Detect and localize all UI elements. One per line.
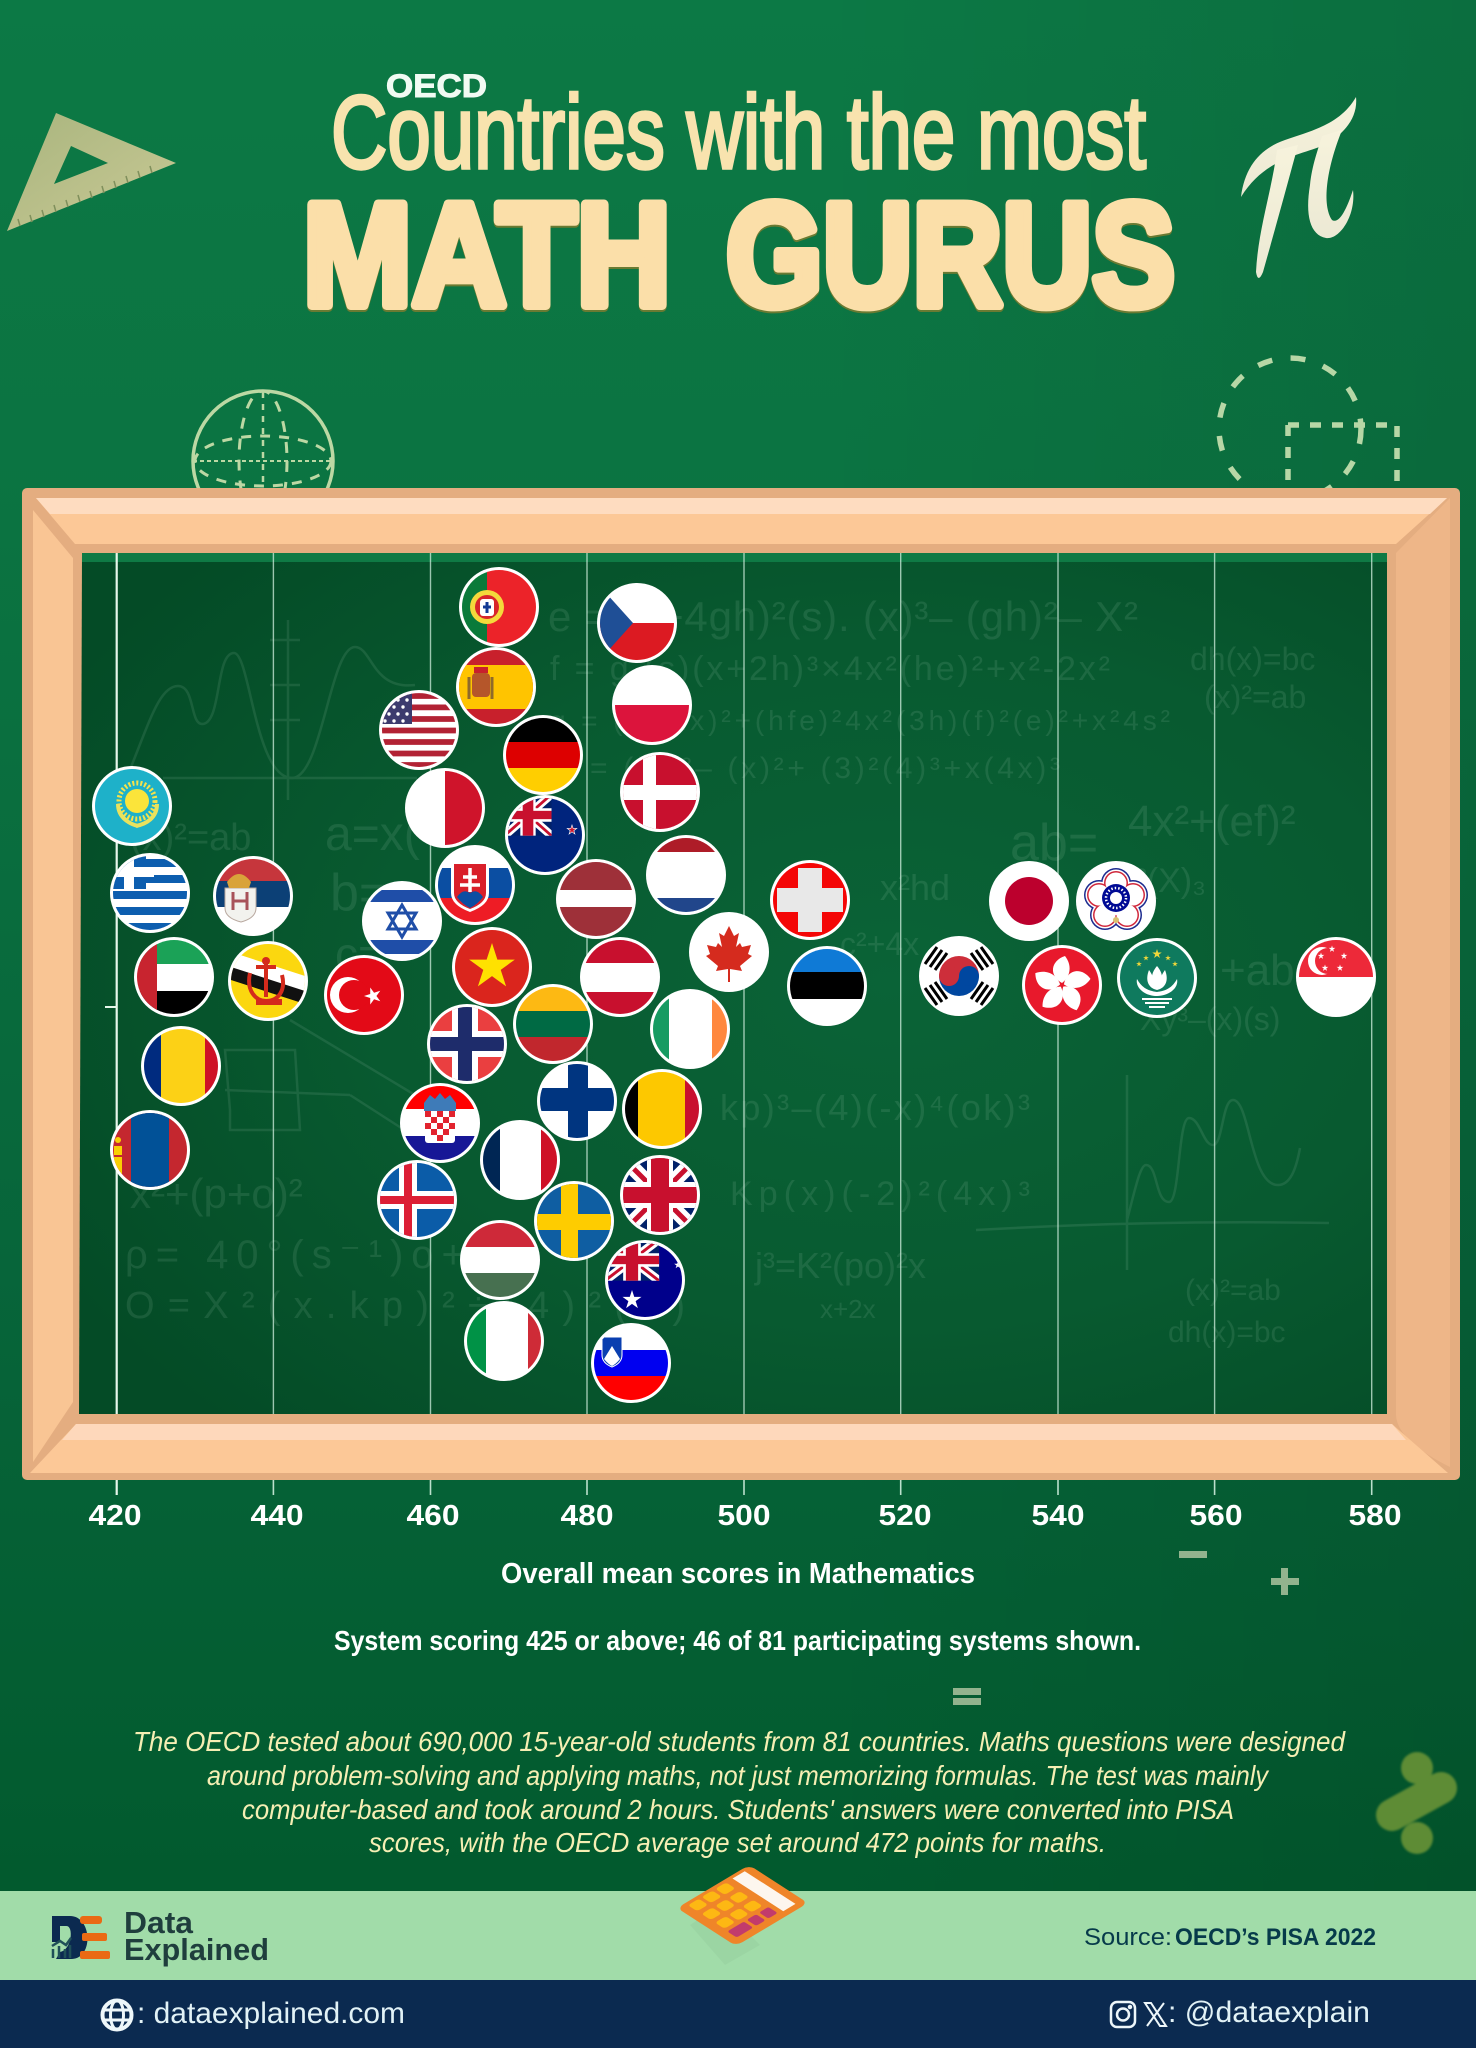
chalk formulas background: x+2x (820, 1294, 876, 1324)
flag: Hungary (460, 1220, 540, 1300)
bubble chart: country flags (92, 567, 1376, 1403)
flag: Israel (362, 881, 442, 961)
flag: Brunei (228, 941, 308, 1021)
icon: dashed sphere (191, 389, 335, 488)
flag: Slovenia (591, 1323, 671, 1403)
chalk formulas background: O=X²(x.kp)²÷(4)²(k) (125, 1285, 685, 1327)
explanatory paragraph (133, 1726, 1346, 1858)
social handle: : @dataexplain (1168, 1996, 1370, 2029)
icon: set square triangle (7, 113, 176, 231)
flag: Turkey (324, 955, 404, 1035)
logo: Data Explained: Explained (124, 1932, 269, 1967)
flag: Croatia (400, 1083, 480, 1163)
flag: Germany (503, 715, 583, 795)
flag: Greece (110, 853, 190, 933)
chalk formulas background: +ab (1220, 946, 1295, 995)
logo: Data Explained (52, 1905, 269, 1967)
icon: tilted divide symbol (1392, 1752, 1441, 1854)
x-axis labels: 440 (250, 1500, 304, 1532)
title (303, 68, 1175, 336)
icon: pi symbol (1241, 97, 1356, 278)
x-axis labels: 520 (878, 1500, 932, 1532)
chalk formulas background: = (kf)²– (x)²+ (3)²(4)³+x(4x)³ (590, 752, 1060, 785)
flag: Serbia (213, 856, 293, 936)
chalk formulas background: Xy³–(x)(s) (1140, 1001, 1280, 1037)
flag: Chinese Taipei (1076, 861, 1156, 941)
flag: Netherlands (646, 835, 726, 915)
flag: Canada (689, 912, 769, 992)
flag: Czechia (597, 583, 677, 663)
chalk formulas background: dh(x)=bc (1190, 641, 1315, 677)
x-axis labels: 540 (1032, 1500, 1084, 1532)
flag: Romania (141, 1026, 221, 1106)
footer: navy band (0, 1980, 1476, 2048)
explanatory paragraph: computer-based and took around 2 hours. Students' answers were converted into PISA (242, 1794, 1234, 1825)
flag: Finland (537, 1061, 617, 1141)
website: : dataexplained.com (137, 1997, 405, 2030)
source label: Source: (1084, 1924, 1172, 1951)
chalk formulas background: c= (335, 928, 385, 980)
flag: Macau (1117, 938, 1197, 1018)
flag: Switzerland (770, 860, 850, 940)
x-axis labels: 480 (560, 1500, 614, 1532)
flag: Sweden (534, 1181, 614, 1261)
chalk formulas background: (x)²=ab (1185, 1274, 1281, 1307)
flag: United Kingdom (620, 1155, 700, 1235)
title: first line: Countries with the most (331, 75, 1146, 191)
chalk formulas background: c²+4x (840, 926, 919, 962)
source bold text: OECD’s PISA 2022 (1175, 1924, 1376, 1951)
flag: New Zealand (504, 794, 585, 875)
chalk formulas background: Kp(x)(-2)²(4x)³ (730, 1175, 1030, 1213)
flag: Belgium (622, 1069, 702, 1149)
title: MATH GURUS: GURUS (726, 173, 1175, 336)
flag: Spain (456, 647, 536, 727)
explanatory paragraph: scores, with the OECD average set around 472 points for maths. (369, 1827, 1106, 1858)
chalk formulas background: 4x²+(ef)² (1128, 797, 1295, 846)
title: MATH GURUS: MATH (303, 173, 671, 336)
chalk formulas background: x²hd (880, 867, 950, 908)
chalk formulas background: dh(x)=bc (1168, 1316, 1286, 1349)
icon: dashed circle and square (1219, 358, 1397, 500)
flag: Italy (464, 1301, 544, 1381)
chalk formulas background: x²+(p+o)² (130, 1170, 303, 1217)
flag: Austria (580, 937, 660, 1017)
footer: source band (0, 1891, 1476, 1980)
title: OECD kicker: OECD (386, 68, 487, 104)
logo: Data Explained: Data (124, 1905, 194, 1940)
flag: Ireland (650, 989, 730, 1069)
flag: Slovakia (435, 845, 515, 925)
chalk formulas background: j³=K²(po)²x (754, 1245, 926, 1286)
flag: Australia (605, 1239, 685, 1320)
flag: Denmark (620, 752, 700, 832)
chalk formulas background: f = g (s)(x+2h)³×4x²(he)²+x²-2x² (550, 650, 1110, 688)
flag: Hong Kong (1022, 945, 1102, 1025)
icon: calculator (677, 1865, 808, 1965)
icon: instagram (1111, 2002, 1135, 2027)
x-axis labels (88, 1500, 1402, 1532)
chalk formulas background: ab= (1010, 814, 1098, 872)
explanatory paragraph: The OECD tested about 690,000 15-year-old students from 81 countries. Maths questions were designed (133, 1726, 1346, 1757)
chalk formulas background (125, 593, 1329, 1349)
flag: South Korea (919, 936, 999, 1016)
x-axis labels: 460 (406, 1500, 460, 1532)
flag: Latvia (556, 859, 636, 939)
chalk formulas background: kp)³–(4)(-x)⁴(ok)³ (720, 1087, 1030, 1128)
chalk formulas background: g = (x)(2x)²+(hfe)²4x²(3h)(f)²(e)²+x²4s² (550, 705, 1170, 736)
flag: Kazakhstan (92, 766, 172, 846)
explanatory paragraph: around problem-solving and applying maths, not just memorizing formulas. The test was mainly (207, 1760, 1270, 1791)
chalk formulas background: (x)²=ab (1204, 679, 1306, 715)
chalk formulas background: e = (x+4gh)²(s). (x)³– (gh)²– X² (548, 593, 1138, 640)
chalk formulas background: ρ= 40°(s⁻¹)o+p (125, 1233, 495, 1277)
axis title: Overall mean scores in Mathematics (501, 1558, 975, 1590)
flag: Poland (612, 665, 692, 745)
flag: Japan (989, 861, 1069, 941)
x-axis labels: 420 (88, 1500, 142, 1532)
flag: France (480, 1120, 560, 1200)
icon: globe (102, 2000, 132, 2030)
chart gridlines and axis ticks (105, 553, 1372, 1495)
chart subtitle: System scoring 425 or above; 46 of 81 participating systems shown. (334, 1625, 1141, 1656)
flag: Malta (405, 768, 485, 848)
flag: Lithuania (513, 984, 593, 1064)
chalk formulas background: b= (330, 864, 389, 922)
flag: Norway (427, 1004, 507, 1084)
chalk formulas background: a=x( (325, 808, 420, 861)
x-axis labels: 500 (718, 1500, 770, 1532)
x-axis labels: 560 (1190, 1500, 1242, 1532)
flag: Mongolia (110, 1110, 190, 1190)
icon: math symbols minus plus equals (953, 1551, 1299, 1705)
flag: Vietnam (452, 927, 532, 1007)
flag: Singapore (1296, 937, 1376, 1017)
title: MATH GURUS (303, 173, 1175, 336)
chalk formulas background: (x)²=ab (130, 817, 251, 859)
flag: Portugal (459, 567, 539, 647)
flag: United States (379, 690, 459, 770)
chalk formulas background: c.s²(X)₃ (1092, 862, 1206, 900)
flag: United Arab Emirates (134, 937, 214, 1017)
flag: Iceland (377, 1160, 457, 1240)
icon: X logo (1145, 2003, 1166, 2026)
chalkboard frame (22, 488, 1460, 1480)
flag: Estonia (787, 946, 867, 1026)
x-axis labels: 580 (1348, 1500, 1402, 1532)
